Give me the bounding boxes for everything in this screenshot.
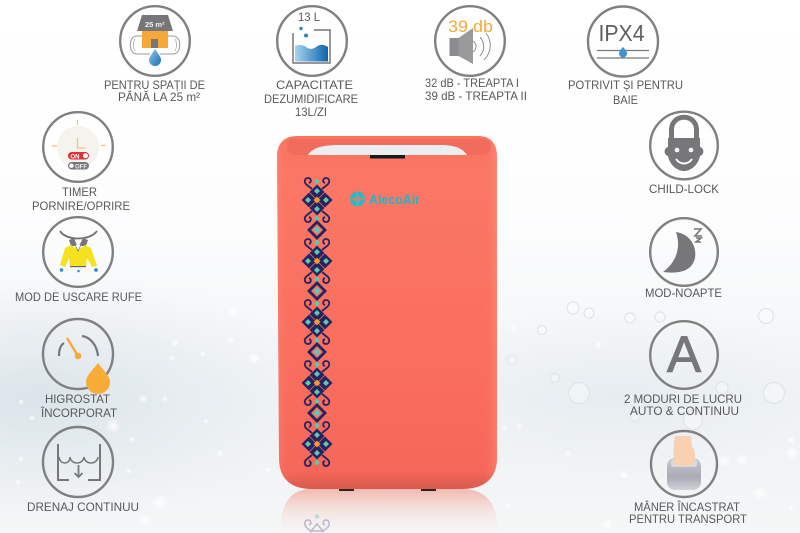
device reflection bbox=[281, 489, 497, 533]
icon: house: 25 m² bbox=[145, 20, 165, 29]
label: PENTRU SPAȚII DE bbox=[104, 78, 205, 92]
feature: night mode bbox=[645, 218, 722, 300]
label: 32 dB - TREAPTA I bbox=[425, 76, 519, 90]
label: POTRIVIT ȘI PENTRU bbox=[568, 78, 683, 92]
icon: gauge and drop bbox=[59, 336, 110, 394]
label: ÎNCORPORAT bbox=[40, 405, 118, 420]
feature: working modes bbox=[624, 321, 742, 418]
brand logo bbox=[350, 192, 420, 207]
icon: shirt bbox=[60, 231, 98, 272]
device body bbox=[277, 136, 497, 489]
icon: drain bbox=[58, 444, 100, 480]
label: 13L/ZI bbox=[295, 105, 327, 119]
feature: carry handle bbox=[629, 431, 748, 526]
top recess and filter bbox=[287, 139, 491, 155]
label: PÂNĂ LA 25 m² bbox=[118, 89, 200, 104]
icon: speaker: 39 db bbox=[448, 17, 493, 36]
label: DRENAJ CONTINUU bbox=[27, 500, 139, 514]
icon: clock with on/off: OFF bbox=[75, 164, 87, 170]
feature: continuous drain bbox=[27, 427, 139, 514]
label bbox=[624, 392, 742, 418]
icon: padlock face bbox=[665, 117, 703, 171]
display bbox=[370, 155, 405, 158]
icon: moon bbox=[663, 229, 702, 273]
label bbox=[629, 499, 748, 526]
label: MOD-NOAPTE bbox=[645, 286, 722, 300]
feet bbox=[339, 489, 436, 491]
icon: IPX4: IPX4 bbox=[598, 20, 645, 46]
label: MÂNER ÎNCASTRAT bbox=[634, 499, 741, 514]
water droplets bbox=[15, 302, 798, 531]
folk pattern bbox=[302, 178, 332, 466]
label: MOD DE USCARE RUFE bbox=[15, 290, 142, 304]
label bbox=[40, 392, 118, 420]
label: CAPACITATE bbox=[276, 80, 353, 92]
label: TIMER bbox=[62, 185, 97, 199]
label bbox=[264, 80, 358, 119]
feature: hygrostat bbox=[40, 319, 118, 420]
feature: capacity bbox=[264, 6, 358, 119]
icon: clock with on/off bbox=[52, 120, 106, 170]
label bbox=[32, 185, 130, 213]
icon: water tank: 13 L bbox=[298, 10, 320, 24]
label: DEZUMIDIFICARE bbox=[264, 92, 358, 106]
feature: room size bbox=[104, 6, 205, 104]
label: 2 MODURI DE LUCRU bbox=[624, 392, 742, 406]
icon: letter A: A bbox=[667, 326, 701, 383]
label: 39 dB - TREAPTA II bbox=[425, 89, 527, 103]
icon: clock with on/off: ON bbox=[70, 154, 80, 160]
label bbox=[425, 76, 527, 103]
icon: hand on handle bbox=[667, 436, 701, 490]
label: PENTRU TRANSPORT bbox=[629, 512, 748, 526]
label bbox=[104, 78, 205, 104]
label: CHILD-LOCK bbox=[649, 182, 719, 196]
feature: child lock bbox=[649, 112, 719, 196]
feature: timer bbox=[32, 112, 130, 213]
feature: laundry drying bbox=[15, 217, 142, 304]
label bbox=[568, 78, 683, 107]
brand logo: AlecoAir bbox=[369, 193, 420, 207]
device: coral dehumidifier bbox=[277, 136, 497, 491]
label: PORNIRE/OPRIRE bbox=[32, 199, 130, 213]
label: AUTO & CONTINUU bbox=[630, 404, 739, 418]
feature: IPX4 bbox=[568, 6, 683, 107]
label: BAIE bbox=[613, 93, 638, 107]
feature: noise bbox=[425, 6, 527, 103]
label: HIGROSTAT bbox=[45, 392, 111, 406]
